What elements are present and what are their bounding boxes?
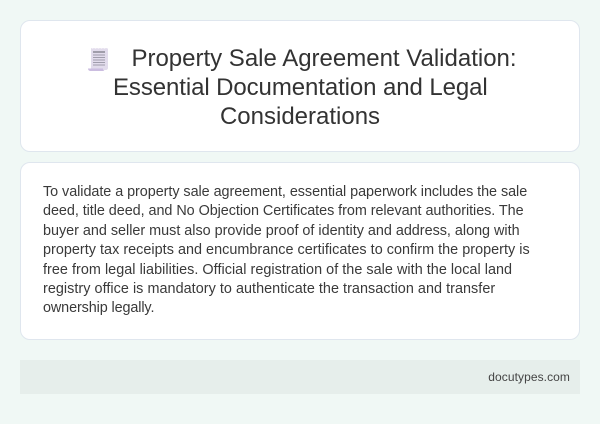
text block: deed, title deed, and No Objection Certificates from relevant authorities. The [43, 203, 524, 219]
text block: registry office is mandatory to authenticate the transaction and transfer [43, 281, 495, 297]
panel: description [20, 162, 580, 340]
panel: title card [20, 20, 580, 152]
footer source text: docutypes.com [488, 370, 570, 384]
title: Property Sale Agreement Validation: [131, 45, 517, 72]
icon: document [88, 48, 108, 71]
text block: property tax receipts and encumbrance certificates to confirm the property is [43, 242, 530, 258]
title: Essential Documentation and Legal [113, 74, 488, 101]
text block: To validate a property sale agreement, essential paperwork includes the sale [43, 184, 527, 200]
footer bar [20, 360, 580, 394]
text block: buyer and seller must also provide proof of identity and address, along with [43, 223, 520, 239]
title [113, 45, 517, 130]
text block [43, 184, 530, 316]
text block: ownership legally. [43, 300, 154, 316]
title: Considerations [220, 103, 380, 130]
text block: free from legal liabilities. Official registration of the sale with the local land [43, 262, 512, 278]
